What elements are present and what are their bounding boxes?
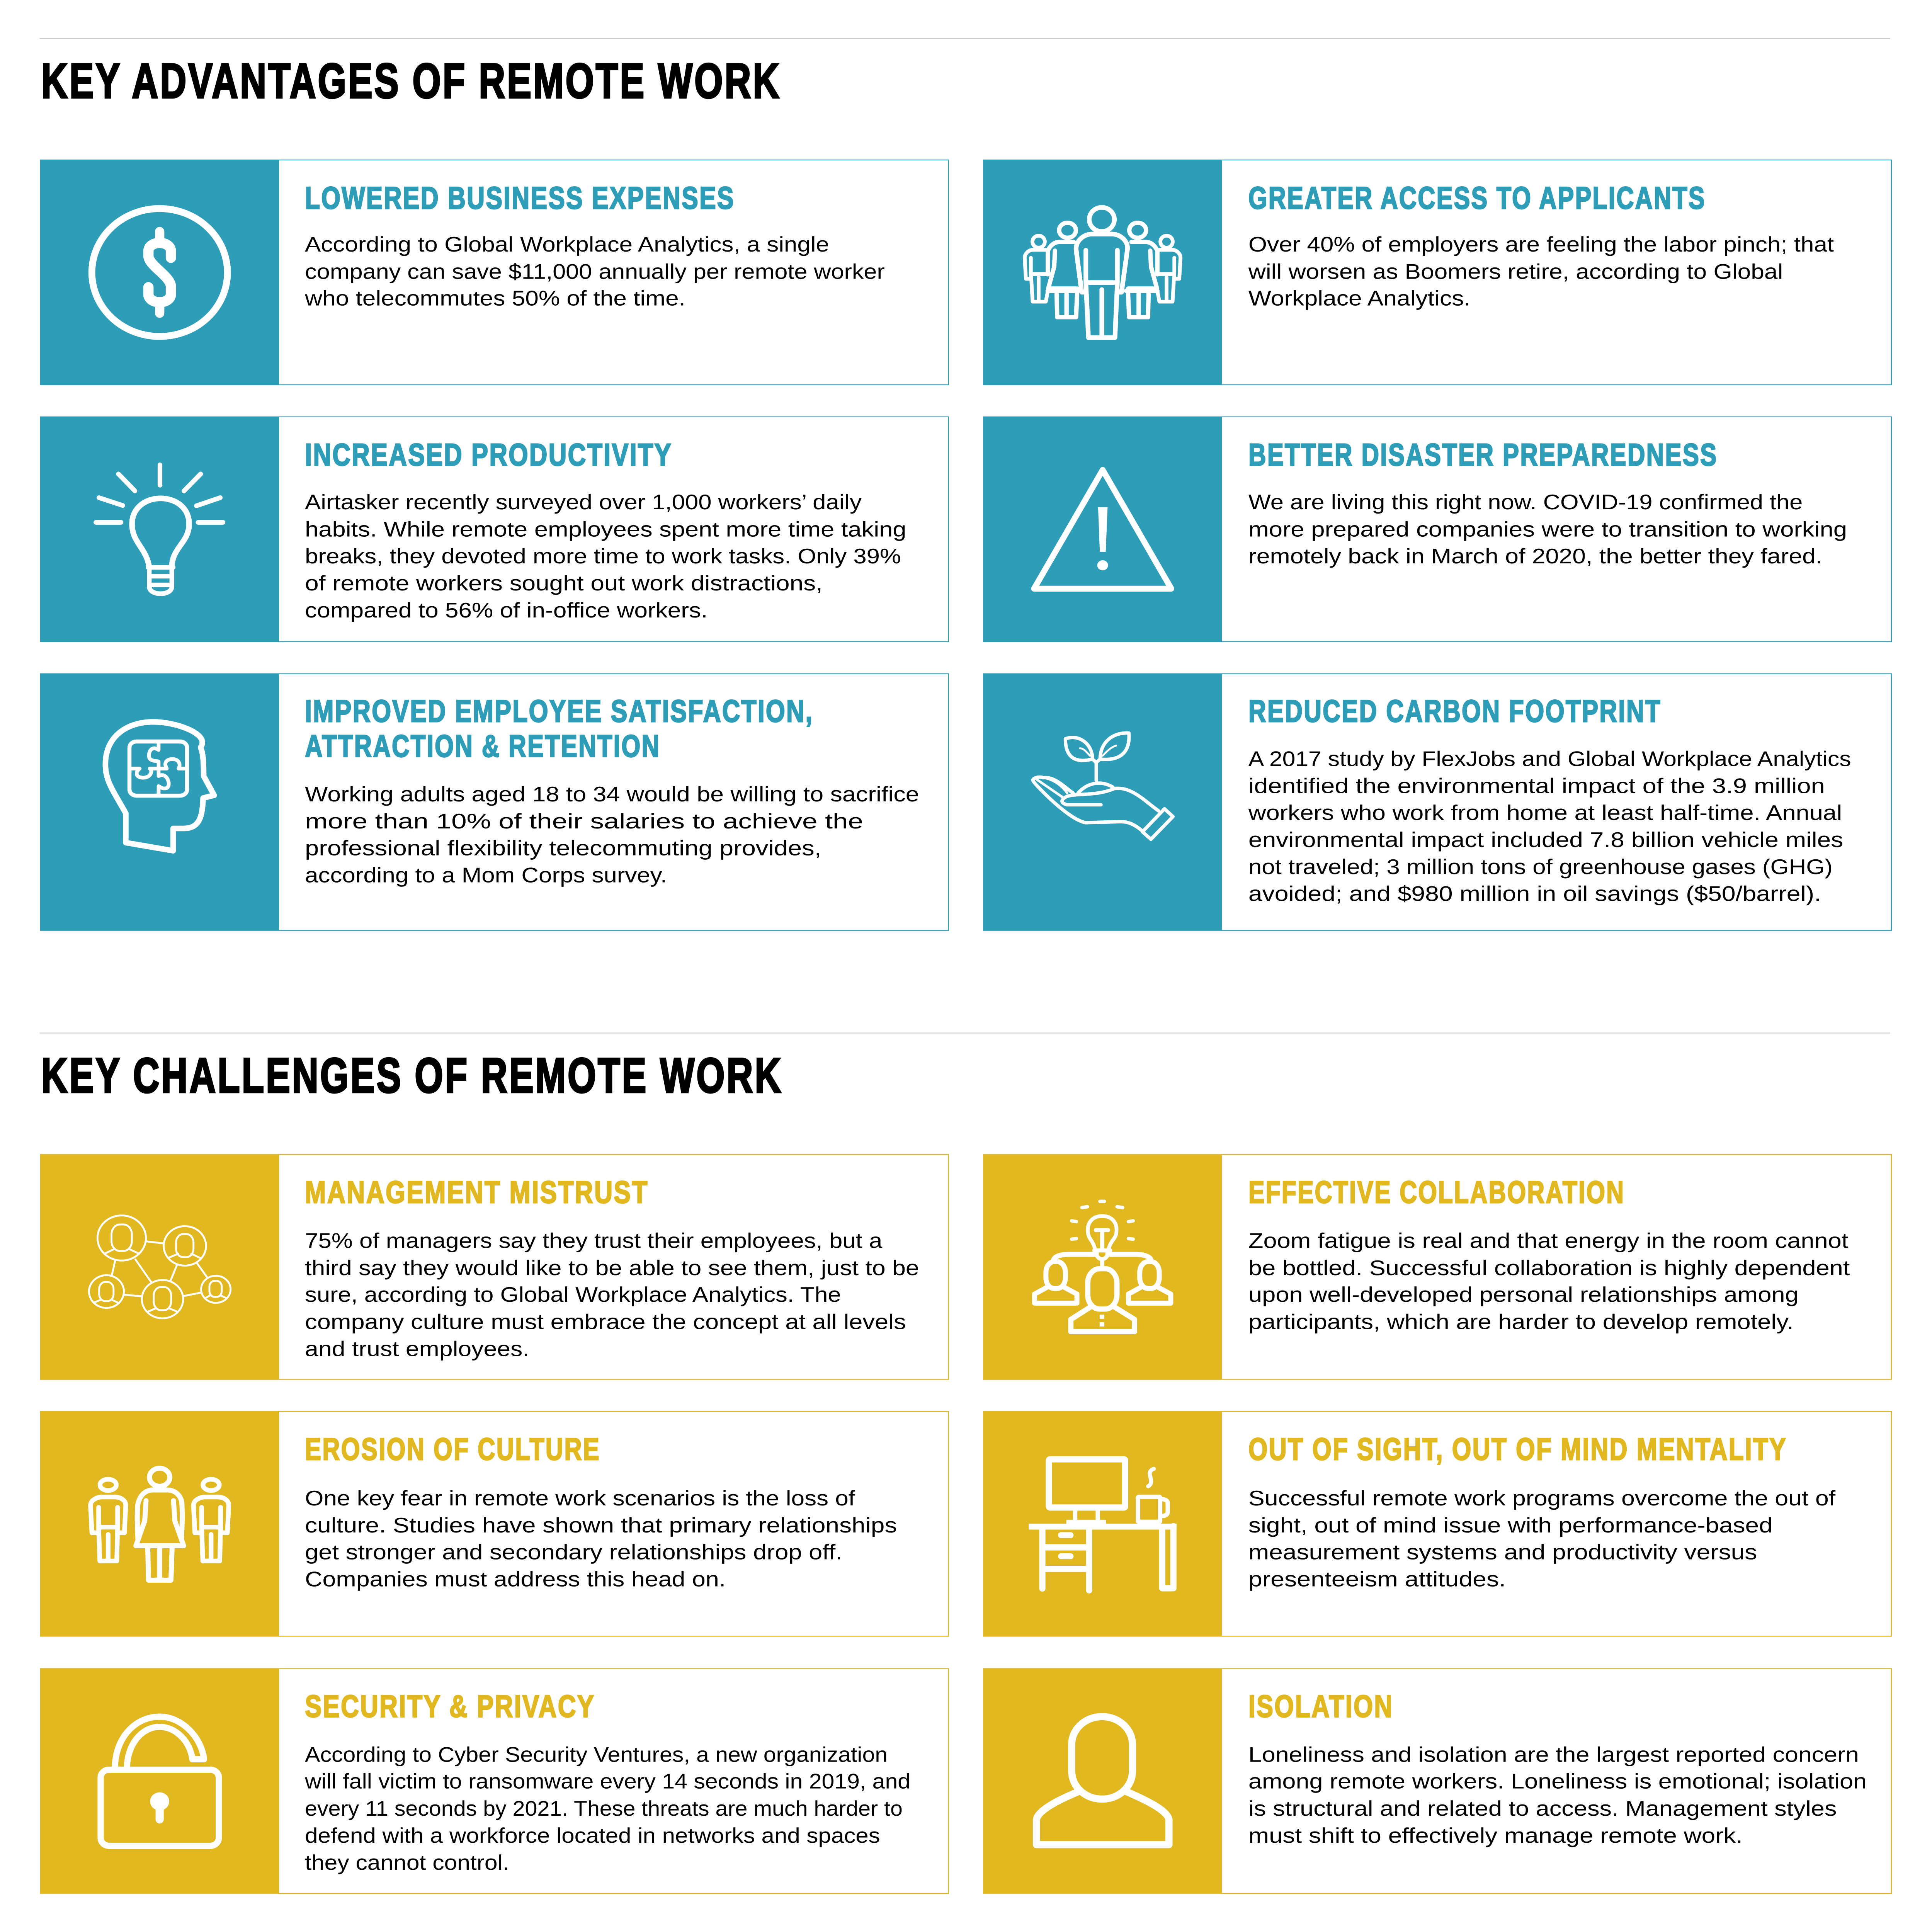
body text: sight, out of mind issue with performance-based [1248, 1514, 1773, 1537]
panel: teal icon block [983, 160, 1222, 385]
card: better disaster preparedness [983, 417, 1891, 642]
body text: according to a Mom Corps survey. [305, 864, 667, 887]
body text: Airtasker recently surveyed over 1,000 workers’ daily [305, 490, 862, 514]
icon: group of people [1025, 207, 1180, 338]
icon: team sharing idea [1035, 1201, 1171, 1332]
body text: Working adults aged 18 to 34 would be willing to sacrifice [305, 782, 919, 806]
heading: GREATER ACCESS TO APPLICANTS [1248, 180, 1706, 215]
body text: identified the environmental impact of the 3.9 million [1248, 774, 1825, 798]
body text: Workplace Analytics. [1248, 287, 1471, 310]
card: erosion of culture [41, 1412, 949, 1636]
body text: One key fear in remote work scenarios is the loss of [305, 1486, 855, 1510]
body text: of remote workers sought out work distractions, [305, 571, 823, 595]
section: key challenges [41, 1048, 1891, 1893]
card: lowered business expenses [41, 160, 949, 385]
body text [305, 490, 906, 622]
title: key advantages: KEY ADVANTAGES OF REMOTE WORK [41, 54, 781, 109]
panel: yellow icon block [41, 1412, 279, 1636]
body text [304, 233, 885, 310]
panel: yellow icon block [41, 1668, 279, 1893]
panel: yellow icon block [983, 1412, 1222, 1636]
section: key advantages [41, 54, 1891, 930]
body text: breaks, they devoted more time to work tasks. Only 39% [305, 544, 901, 568]
body text: culture. Studies have shown that primary relationships [305, 1514, 897, 1537]
icon: single person [1036, 1717, 1169, 1845]
body text: compared to 56% of in-office workers. [305, 599, 707, 622]
body text: must shift to effectively manage remote work. [1248, 1824, 1743, 1847]
body text: company culture must embrace the concept at all levels [305, 1310, 906, 1334]
card: reduced carbon footprint [983, 674, 1891, 930]
body text: According to Global Workplace Analytics, a single [305, 233, 829, 256]
card: management mistrust [41, 1155, 949, 1379]
card: improved employee satisfaction [41, 674, 949, 930]
body text: more than 10% of their salaries to achieve the [305, 810, 863, 833]
panel: teal icon block [41, 417, 279, 642]
heading: EFFECTIVE COLLABORATION [1248, 1175, 1625, 1210]
body text: get stronger and secondary relationships drop off. [305, 1541, 842, 1564]
body text [1248, 1229, 1850, 1334]
body text: presenteeism attitudes. [1248, 1568, 1506, 1591]
icon: three people [90, 1468, 229, 1580]
icon: hand holding seedling [1033, 733, 1173, 839]
body text: 75% of managers say they trust their employees, but a [305, 1229, 883, 1253]
body text: is structural and related to access. Management styles [1248, 1797, 1837, 1820]
body text: environmental impact included 7.8 billion vehicle miles [1248, 828, 1843, 852]
body text: Companies must address this head on. [305, 1568, 726, 1591]
icon: open padlock [101, 1717, 219, 1846]
body text: defend with a workforce located in networks and spaces [305, 1824, 880, 1847]
body text: Loneliness and isolation are the largest reported concern [1248, 1743, 1859, 1767]
card: out of sight out of mind [983, 1412, 1891, 1636]
body text: Zoom fatigue is real and that energy in the room cannot [1248, 1229, 1848, 1253]
icon: head with puzzle [105, 722, 214, 851]
body text: workers who work from home at least half-time. Annual [1248, 801, 1842, 825]
body text: avoided; and $980 million in oil savings ($50/barrel). [1248, 882, 1821, 906]
body text [1248, 1486, 1836, 1591]
body text: among remote workers. Loneliness is emotional; isolation [1248, 1770, 1867, 1793]
body text: company can save $11,000 annually per remote worker [305, 260, 885, 283]
body text: sure, according to Global Workplace Analytics. The [305, 1283, 841, 1306]
icon: dollar coin [92, 209, 228, 337]
body text [305, 1486, 897, 1591]
body text: We are living this right now. COVID-19 confirmed the [1248, 490, 1803, 514]
panel: yellow icon block [983, 1155, 1222, 1379]
body text: participants, which are harder to develop remotely. [1248, 1310, 1794, 1334]
heading: MANAGEMENT MISTRUST [305, 1175, 649, 1210]
body text: not traveled; 3 million tons of greenhouse gases (GHG) [1248, 855, 1833, 879]
heading: INCREASED PRODUCTIVITY [305, 437, 672, 472]
body text: be bottled. Successful collaboration is highly dependent [1248, 1256, 1850, 1280]
body text: will worsen as Boomers retire, according to Global [1248, 260, 1783, 283]
body text: remotely back in March of 2020, the better they fared. [1248, 544, 1822, 568]
panel: yellow icon block [983, 1668, 1222, 1893]
body text [305, 782, 919, 887]
body text: will fall victim to ransomware every 14 seconds in 2019, and [304, 1770, 910, 1793]
body text [304, 1743, 910, 1874]
icon: warning triangle [1034, 470, 1171, 588]
panel: teal icon block [41, 160, 279, 385]
heading: REDUCED CARBON FOOTPRINT [1248, 694, 1662, 728]
body text: Over 40% of employers are feeling the labor pinch; that [1248, 233, 1834, 256]
body text: more prepared companies were to transition to working [1248, 518, 1847, 541]
body text: who telecommutes 50% of the time. [304, 287, 685, 310]
card: greater access to applicants [983, 160, 1891, 385]
panel: teal icon block [983, 674, 1222, 930]
body text [1248, 1743, 1867, 1847]
title: key challenges: KEY CHALLENGES OF REMOTE WORK [41, 1048, 783, 1103]
panel: teal icon block [983, 417, 1222, 642]
heading: EROSION OF CULTURE [305, 1432, 600, 1466]
heading: ISOLATION [1248, 1689, 1393, 1724]
body text: habits. While remote employees spent more time taking [305, 518, 906, 541]
card: increased productivity [41, 417, 949, 642]
body text: every 11 seconds by 2021. These threats are much harder to [305, 1797, 903, 1820]
icon: people network [89, 1216, 231, 1318]
heading: IMPROVED EMPLOYEE SATISFACTION, [305, 694, 813, 728]
body text: third say they would like to be able to see them, just to be [305, 1256, 919, 1280]
body text: upon well-developed personal relationships among [1248, 1283, 1799, 1306]
body text: Successful remote work programs overcome the out of [1248, 1486, 1836, 1510]
body text: A 2017 study by FlexJobs and Global Workplace Analytics [1248, 747, 1851, 771]
card: security and privacy [41, 1668, 949, 1893]
body text: measurement systems and productivity versus [1248, 1541, 1757, 1564]
card: isolation [983, 1668, 1891, 1893]
body text: and trust employees. [305, 1337, 529, 1361]
heading: ATTRACTION & RETENTION [305, 729, 660, 764]
body text: they cannot control. [305, 1851, 509, 1874]
card: effective collaboration [983, 1155, 1891, 1379]
heading: SECURITY & PRIVACY [305, 1689, 595, 1724]
body text [1248, 233, 1834, 310]
body text: professional flexibility telecommuting provides, [305, 837, 821, 860]
panel: yellow icon block [41, 1155, 279, 1379]
icon: light bulb [96, 465, 223, 594]
body text [305, 1229, 919, 1361]
heading: LOWERED BUSINESS EXPENSES [305, 180, 735, 215]
icon: desk with monitor and mug [1029, 1459, 1177, 1590]
panel: teal icon block [41, 674, 279, 930]
body text: According to Cyber Security Ventures, a new organization [305, 1743, 888, 1767]
heading: BETTER DISASTER PREPAREDNESS [1248, 437, 1718, 472]
heading [305, 694, 813, 764]
body text [1248, 490, 1847, 568]
body text [1248, 747, 1851, 906]
